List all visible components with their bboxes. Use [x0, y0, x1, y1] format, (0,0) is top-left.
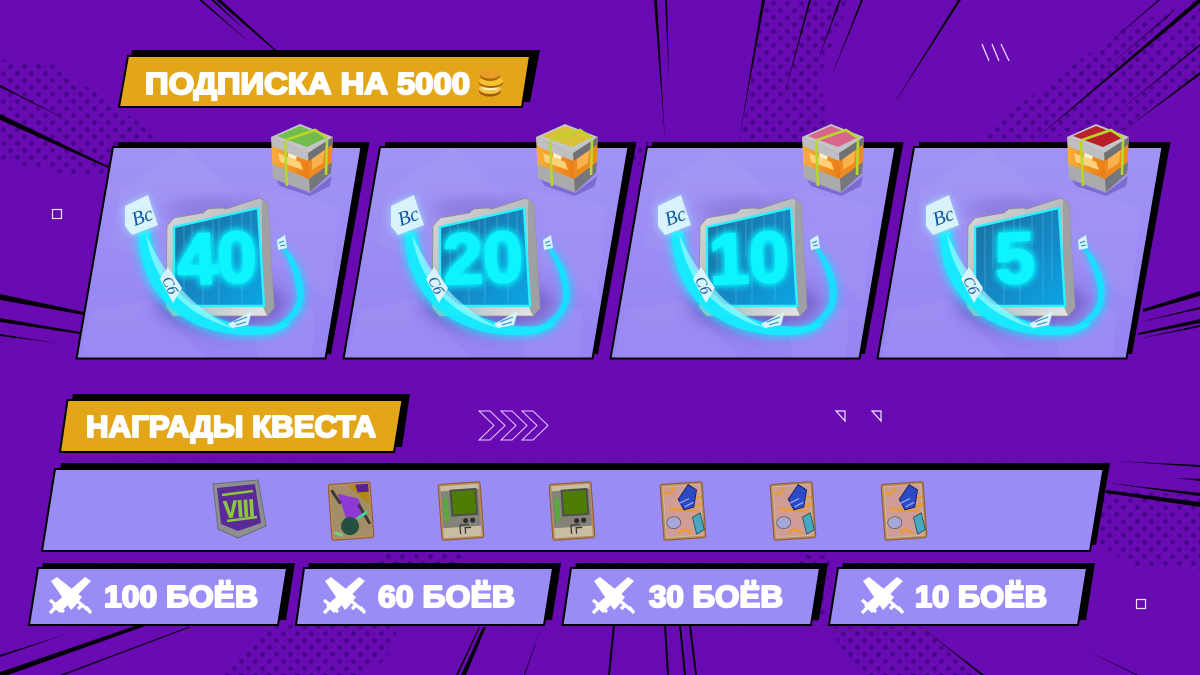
icon: coins: [479, 70, 503, 96]
icon: green crate: [271, 124, 333, 196]
notes: Сб: [691, 274, 713, 298]
icon: red crate: [1067, 124, 1129, 196]
icon: chip card 2: [549, 482, 595, 540]
notes: Сб: [959, 274, 981, 298]
icon: pink crate: [802, 124, 864, 196]
icon: swords: [324, 577, 365, 613]
button: 10 battles: [829, 563, 1095, 625]
panel: subscription tier 5: [878, 124, 1170, 358]
notes: Вс: [930, 203, 957, 231]
icon: rank shield: VIII: [223, 495, 256, 524]
button: 30 battles: [562, 563, 828, 625]
notes: Вс: [395, 203, 422, 231]
button: 60 battles: [296, 563, 561, 625]
icon: rank shield: [213, 480, 266, 538]
icon: chip card 1: [438, 482, 484, 540]
heading: quest rewards: [60, 394, 410, 452]
panel: rewards strip: [42, 463, 1110, 551]
notes: Сб: [424, 274, 446, 298]
arrow: chevrons: [479, 411, 548, 440]
number 5: 5: [994, 218, 1036, 300]
number 20: 20: [442, 218, 524, 300]
button: 100 battles: 100 БОЁВ: [104, 579, 258, 614]
button: 30 battles: 30 БОЁВ: [649, 579, 783, 614]
notes: Вс: [662, 203, 689, 231]
panel: subscription tier 20: [344, 124, 636, 358]
notes: Сб: [158, 274, 180, 298]
icon: swords: [50, 577, 91, 613]
button: 10 battles: 10 БОЁВ: [915, 579, 1047, 614]
button: 100 battles: [29, 563, 295, 625]
icon: blue card 3: [881, 482, 927, 540]
icon: tank card: [328, 482, 374, 540]
icon: swords: [593, 577, 634, 613]
icon: blue card 1: [660, 482, 706, 540]
decorative outlines: [52, 44, 1146, 608]
heading: subscription: [119, 50, 540, 107]
notes: [129, 203, 180, 298]
panel: subscription tier 10: [610, 124, 904, 358]
heading: quest rewards: НАГРАДЫ КВЕСТА: [86, 409, 376, 444]
notes: [395, 203, 446, 298]
button: 60 battles: 60 БОЁВ: [378, 579, 515, 614]
notes: [662, 203, 713, 298]
icon: swords: [862, 577, 903, 613]
panel: subscription tier 40: [76, 124, 370, 358]
number 40: 40: [176, 218, 258, 300]
number 10: 10: [708, 218, 790, 300]
icon: blue card 2: [770, 482, 816, 540]
notes: [930, 203, 981, 298]
heading: subscription: ПОДПИСКА НА 5000: [145, 66, 470, 101]
icon: yellow crate: [536, 124, 598, 196]
notes: Вс: [129, 203, 156, 231]
